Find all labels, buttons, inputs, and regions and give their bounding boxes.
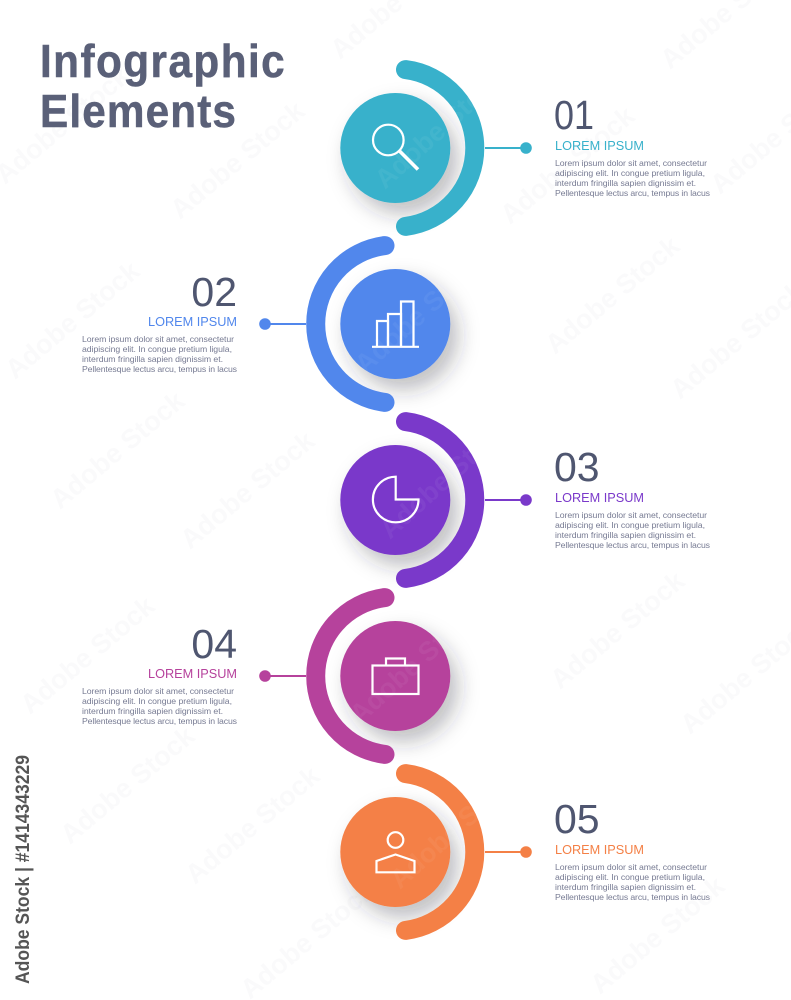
- heading: 03: LOREM IPSUM: [555, 490, 644, 505]
- circle: step 02: [340, 269, 450, 379]
- circle: step 05: [340, 797, 450, 907]
- heading: 05: LOREM IPSUM: [555, 842, 644, 857]
- number: 01: 01: [554, 92, 594, 138]
- text block: 01: Lorem ipsum dolor sit amet, consectetur: [555, 158, 707, 168]
- text block: 01: Pellentesque lectus arcu, tempus in lacus: [555, 188, 711, 198]
- heading: 04: LOREM IPSUM: [148, 666, 237, 681]
- connector: step 04: [259, 670, 306, 682]
- text block: 02: [82, 334, 238, 374]
- background watermark: Adobe Stock: [175, 425, 321, 555]
- step 05: [340, 774, 711, 930]
- watermark over shapes: Adobe Stock: [374, 411, 517, 544]
- text block: 02: interdum fringilla sapien dignissim et.: [82, 354, 223, 364]
- background watermark: Adobe Stock: [180, 760, 326, 890]
- icon: person: [376, 832, 414, 872]
- text block: 03: interdum fringilla sapien dignissim et.: [555, 530, 696, 540]
- circle: step 03: [340, 445, 450, 555]
- icon: bar chart: [372, 302, 419, 347]
- heading: 02: LOREM IPSUM: [148, 314, 237, 329]
- watermark over shapes: Adobe Stock: [384, 761, 527, 894]
- text block: 02: Lorem ipsum dolor sit amet, consectetur: [82, 334, 234, 344]
- background watermark: Adobe Stock: [15, 590, 161, 720]
- text block: 04: adipiscing elit. In congue pretium ligula,: [82, 696, 232, 706]
- text block: 03: Lorem ipsum dolor sit amet, consectetur: [555, 510, 707, 520]
- number: 03: 03: [554, 444, 600, 490]
- background watermark: Adobe Stock: [55, 720, 201, 850]
- text block: 01: interdum fringilla sapien dignissim et.: [555, 178, 696, 188]
- background watermark: Adobe Stock: [0, 255, 146, 385]
- text block: 04: [82, 686, 238, 726]
- text block: 05: Pellentesque lectus arcu, tempus in lacus: [555, 892, 711, 902]
- step 04: [82, 598, 450, 754]
- title: Elements: [40, 86, 236, 137]
- number: 04: 04: [191, 621, 237, 667]
- text block: 05: interdum fringilla sapien dignissim et.: [555, 882, 696, 892]
- text block: 05: adipiscing elit. In congue pretium ligula,: [555, 872, 705, 882]
- arc: step 01: [406, 70, 475, 226]
- text block: 03: [555, 510, 711, 550]
- icon: magnifying glass: [373, 125, 418, 170]
- text block: 05: Lorem ipsum dolor sit amet, consectetur: [555, 862, 707, 872]
- connector: step 03: [485, 494, 532, 506]
- side credit: Adobe Stock | #1414343229: [13, 755, 34, 984]
- background watermark: Adobe Stock: [45, 385, 191, 515]
- text block: 04: Lorem ipsum dolor sit amet, consectetur: [82, 686, 234, 696]
- text block: 05: [555, 862, 711, 902]
- connector: step 01: [485, 142, 532, 154]
- text block: 04: interdum fringilla sapien dignissim et.: [82, 706, 223, 716]
- watermark over shapes: Adobe Stock: [349, 246, 492, 379]
- circle: step 04: [340, 621, 450, 731]
- connector: step 05: [485, 846, 532, 858]
- title: [40, 36, 285, 137]
- text block: 03: adipiscing elit. In congue pretium ligula,: [555, 520, 705, 530]
- arc: step 04: [316, 598, 385, 754]
- step 02: [82, 246, 450, 402]
- arc: step 02: [316, 246, 385, 402]
- icon: briefcase: [372, 658, 418, 694]
- arc: step 05: [406, 774, 475, 930]
- circle: step 01: [340, 93, 450, 203]
- text block: 03: Pellentesque lectus arcu, tempus in lacus: [555, 540, 711, 550]
- arc: step 03: [406, 422, 475, 578]
- text block: 04: Pellentesque lectus arcu, tempus in lacus: [82, 716, 238, 726]
- text block: 02: Pellentesque lectus arcu, tempus in lacus: [82, 364, 238, 374]
- text block: 02: adipiscing elit. In congue pretium ligula,: [82, 344, 232, 354]
- background watermark: Adobe Stock: [540, 230, 686, 360]
- number: 02: 02: [191, 269, 237, 315]
- text block: 01: adipiscing elit. In congue pretium ligula,: [555, 168, 705, 178]
- icon: pie chart: [373, 477, 418, 522]
- watermark over shapes: Adobe Stock: [369, 61, 512, 194]
- heading: 01: LOREM IPSUM: [555, 138, 644, 153]
- text block: 01: [555, 158, 711, 198]
- connector: step 02: [259, 318, 306, 330]
- background watermark: Adobe Stock: [585, 870, 731, 1000]
- background watermark: Adobe Stock: [165, 95, 311, 225]
- background watermark: Adobe Stock: [495, 100, 641, 230]
- background watermark: Adobe Stock: [545, 565, 691, 695]
- number: 05: 05: [554, 796, 600, 842]
- watermark over shapes: [344, 61, 527, 894]
- watermark over shapes: Adobe Stock: [344, 596, 487, 729]
- title: Infographic: [40, 36, 285, 87]
- step 03: [340, 422, 711, 578]
- step 01: [340, 70, 711, 226]
